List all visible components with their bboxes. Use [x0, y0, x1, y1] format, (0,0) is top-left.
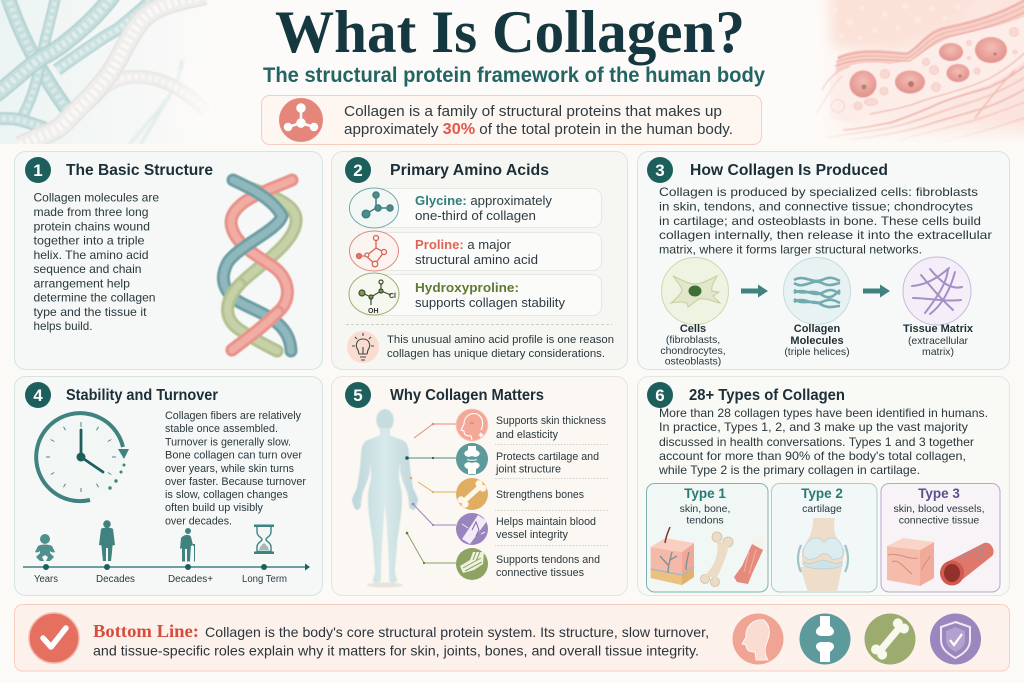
icon: shield — [930, 614, 981, 664]
icon: knee joint — [800, 614, 850, 664]
illustration: human body — [352, 409, 418, 588]
bottom line text — [93, 621, 709, 658]
benefit labels: vessel integrity — [496, 529, 568, 541]
label: tissue matrix: (extracellular — [908, 335, 969, 347]
body text: discussed in health conversations. Types 1 and 3 together — [659, 435, 974, 449]
heading: Stability and Turnover — [66, 387, 218, 404]
body text: Collagen is produced by specialized cells: fibroblasts — [659, 185, 978, 199]
panel 2: primary amino acids — [332, 152, 628, 370]
number badge 5 — [345, 382, 371, 408]
glycine text: Glycine: approximately — [415, 193, 552, 208]
number badge 5: 5 — [353, 386, 363, 405]
number badge 2 — [345, 157, 371, 183]
body text — [165, 410, 306, 528]
label: tissue matrix: Tissue Matrix — [903, 323, 974, 335]
body text: Collagen fibers are relatively — [165, 410, 301, 422]
icon: clock — [36, 413, 129, 501]
timeline labels — [34, 574, 287, 585]
body text: over decades. — [165, 516, 232, 528]
bottom line text: and tissue-specific roles explain why it matters for skin, joints, bones, and overall tissue integrity. — [93, 642, 699, 658]
body text: helix. The amino acid — [34, 248, 148, 262]
icon: collagen molecules — [784, 258, 850, 324]
label: cells — [660, 323, 726, 368]
number badge 2: 2 — [353, 161, 363, 180]
icon: tendon — [456, 548, 488, 580]
illustration: blood vessel — [940, 543, 994, 586]
note text: This unusual amino acid profile is one reason — [387, 334, 614, 346]
heading: How Collagen Is Produced — [690, 162, 888, 179]
icon: skin — [456, 409, 488, 441]
body text: Bone collagen can turn over — [165, 450, 302, 462]
icon: hydroxyproline molecule: OH — [368, 308, 378, 315]
benefit labels: Protects cartilage and — [496, 451, 599, 463]
label: collagen molecules: Collagen — [794, 323, 841, 335]
row: hydroxyproline — [349, 273, 602, 316]
label: cells: (fibroblasts, — [666, 334, 720, 346]
card: type 2 — [772, 484, 877, 592]
type 3 label: Type 3 — [918, 486, 960, 501]
panel 1: the basic structure — [14, 152, 322, 370]
label: tissue matrix: matrix) — [922, 346, 954, 358]
number badge 6: 6 — [655, 386, 665, 405]
number badge 1 — [25, 157, 51, 183]
icon: adult — [99, 520, 115, 561]
proline text: Proline: a major — [415, 237, 512, 252]
benefit labels — [495, 415, 606, 579]
label: cells: chondrocytes, — [660, 345, 726, 357]
body text — [34, 190, 159, 333]
proline text — [415, 237, 538, 267]
benefit labels: Supports tendons and — [496, 554, 600, 566]
panel 5: why collagen matters — [332, 376, 628, 596]
type 3 tissues text — [893, 503, 985, 526]
body text: over years, while skin turns — [165, 463, 294, 475]
title: What Is Collagen? — [275, 0, 745, 65]
triple helix illustration — [223, 180, 296, 351]
panel 6: types of collagen — [638, 376, 1010, 596]
body text: More than 28 collagen types have been identified in humans. — [659, 406, 988, 420]
body text: over faster. Because turnover — [165, 476, 306, 488]
body text: together into a triple — [34, 234, 145, 248]
illustration: bone — [700, 532, 733, 586]
hydroxyproline text — [415, 280, 566, 310]
benefit labels: Helps maintain blood — [496, 516, 596, 528]
benefit labels: Supports skin thickness — [496, 415, 606, 427]
callout text: approximately 30% of the total protein in the human body. — [344, 121, 733, 138]
heading: The Basic Structure — [66, 162, 213, 179]
number badge 4 — [25, 382, 51, 408]
panel 4: stability and turnover — [14, 376, 1010, 671]
leader lines — [405, 423, 456, 564]
type 1 label: Type 1 — [684, 486, 726, 501]
heading: Primary Amino Acids — [390, 162, 549, 179]
glycine text: one-third of collagen — [415, 208, 536, 223]
icon: glycine molecule — [350, 188, 398, 228]
heading: 28+ Types of Collagen — [689, 387, 845, 404]
bottom line banner — [14, 604, 1010, 671]
glycine text — [415, 193, 552, 223]
background image: skin tissue — [805, 0, 1024, 144]
type 3 tissues text: connective tissue — [899, 514, 979, 526]
body text: is slow, collagen changes — [165, 489, 288, 501]
arrow — [863, 284, 890, 298]
benefit labels: connective tissues — [496, 567, 584, 579]
hydroxyproline text: supports collagen stability — [415, 295, 566, 310]
icon: baby — [35, 534, 55, 561]
icon: blood vessel — [456, 513, 488, 545]
illustration: skin cube — [651, 527, 694, 585]
icon: light bulb — [347, 331, 379, 363]
timeline labels: Long Term — [242, 574, 287, 585]
type 3 tissues text: skin, blood vessels, — [893, 503, 985, 515]
body text: in cartilage; and osteoblasts in bone. These cells build — [659, 214, 981, 228]
type 2 label: Type 2 — [801, 486, 843, 501]
icon: hourglass — [254, 524, 274, 554]
label: cells: osteoblasts) — [665, 356, 721, 368]
body text: Turnover is generally slow. — [165, 436, 291, 448]
body text: made from three long — [34, 205, 148, 219]
number badge 3: 3 — [655, 161, 665, 180]
number badge 1: 1 — [33, 161, 43, 180]
definition callout — [262, 96, 762, 144]
arrow — [741, 284, 768, 298]
icon: check mark — [29, 613, 79, 663]
timeline labels: Decades — [96, 574, 135, 585]
illustration: knee — [798, 518, 848, 592]
body text: helps build. — [34, 319, 92, 333]
label: collagen molecules: Molecules — [790, 335, 844, 347]
label: cells: Cells — [680, 323, 706, 335]
type 1 tissues text: skin, bone, — [680, 503, 730, 515]
label: tissue matrix — [903, 323, 974, 358]
body text: Collagen molecules are — [34, 190, 159, 204]
bottom line text: Collagen is the body's core structural protein system. Its structure, slow turnover, — [205, 624, 709, 640]
subtitle: The structural protein framework of the human body — [263, 64, 765, 87]
body text: account for more than 90% of the body's total collagen, — [659, 449, 966, 463]
panel 3: how collagen is produced — [638, 152, 1010, 370]
note text — [387, 334, 614, 360]
icon: bone — [864, 614, 916, 664]
icon: molecule — [279, 98, 323, 142]
label: collagen molecules — [784, 323, 850, 358]
icon: tissue matrix — [903, 257, 971, 325]
label: collagen molecules: (triple helices) — [784, 346, 850, 358]
number badge 6 — [647, 382, 673, 408]
benefit labels: and elasticity — [496, 429, 558, 441]
row: glycine — [350, 188, 602, 228]
body text — [659, 185, 992, 256]
bottom line text: Bottom Line: — [93, 621, 199, 641]
benefit labels: Strengthens bones — [496, 489, 584, 501]
body text: In practice, Types 1, 2, and 3 make up the vast majority — [659, 420, 968, 434]
heading: Why Collagen Matters — [390, 387, 544, 404]
icon: elder with cane — [180, 528, 195, 562]
row: proline — [350, 231, 602, 271]
illustration: tendon — [734, 537, 764, 584]
timeline — [23, 520, 310, 585]
icon: hydroxyproline molecule: Cl — [389, 293, 396, 300]
body text — [658, 406, 988, 477]
body text: collagen internally, then release it into the extracellular — [659, 228, 992, 242]
body text: often build up visibly — [165, 502, 263, 514]
illustration: skin cube — [887, 538, 934, 586]
number badge 4: 4 — [33, 386, 43, 405]
body text: arrangement help — [34, 276, 130, 290]
body text: determine the collagen — [34, 290, 156, 304]
timeline labels: Decades+ — [168, 574, 213, 585]
icon: face — [732, 614, 784, 664]
body text: type and the tissue it — [34, 305, 147, 319]
type 1 tissues text — [680, 503, 730, 526]
callout text: Collagen is a family of structural proteins that makes up — [344, 103, 722, 120]
icon: cell — [662, 258, 728, 324]
icon: bone — [456, 478, 488, 510]
card: type 3 — [881, 484, 1000, 592]
type 2 tissue text: cartilage — [802, 503, 842, 515]
number badge 3 — [647, 157, 673, 183]
proline text: structural amino acid — [415, 252, 538, 267]
body text: protein chains wound — [34, 220, 150, 234]
icon: proline molecule — [350, 231, 398, 271]
note text: collagen has unique dietary considerations. — [387, 348, 605, 360]
callout text — [344, 103, 733, 138]
timeline labels: Years — [34, 574, 58, 585]
body text: in skin, tendons, and connective tissue; chondrocytes — [659, 200, 973, 214]
type 1 tissues text: tendons — [686, 514, 724, 526]
icon: hydroxyproline molecule — [349, 273, 399, 315]
icon: joint — [456, 443, 488, 475]
background image: collagen fibres — [0, 0, 208, 144]
card: type 1 — [646, 484, 768, 592]
body text: stable once assembled. — [165, 423, 278, 435]
body text: while Type 2 is the primary collagen in cartilage. — [658, 463, 920, 477]
body text: sequence and chain — [34, 262, 142, 276]
benefit labels: joint structure — [495, 464, 561, 476]
body text: matrix, where it forms larger structural networks. — [659, 242, 922, 256]
hydroxyproline text: Hydroxyproline: — [415, 280, 519, 295]
